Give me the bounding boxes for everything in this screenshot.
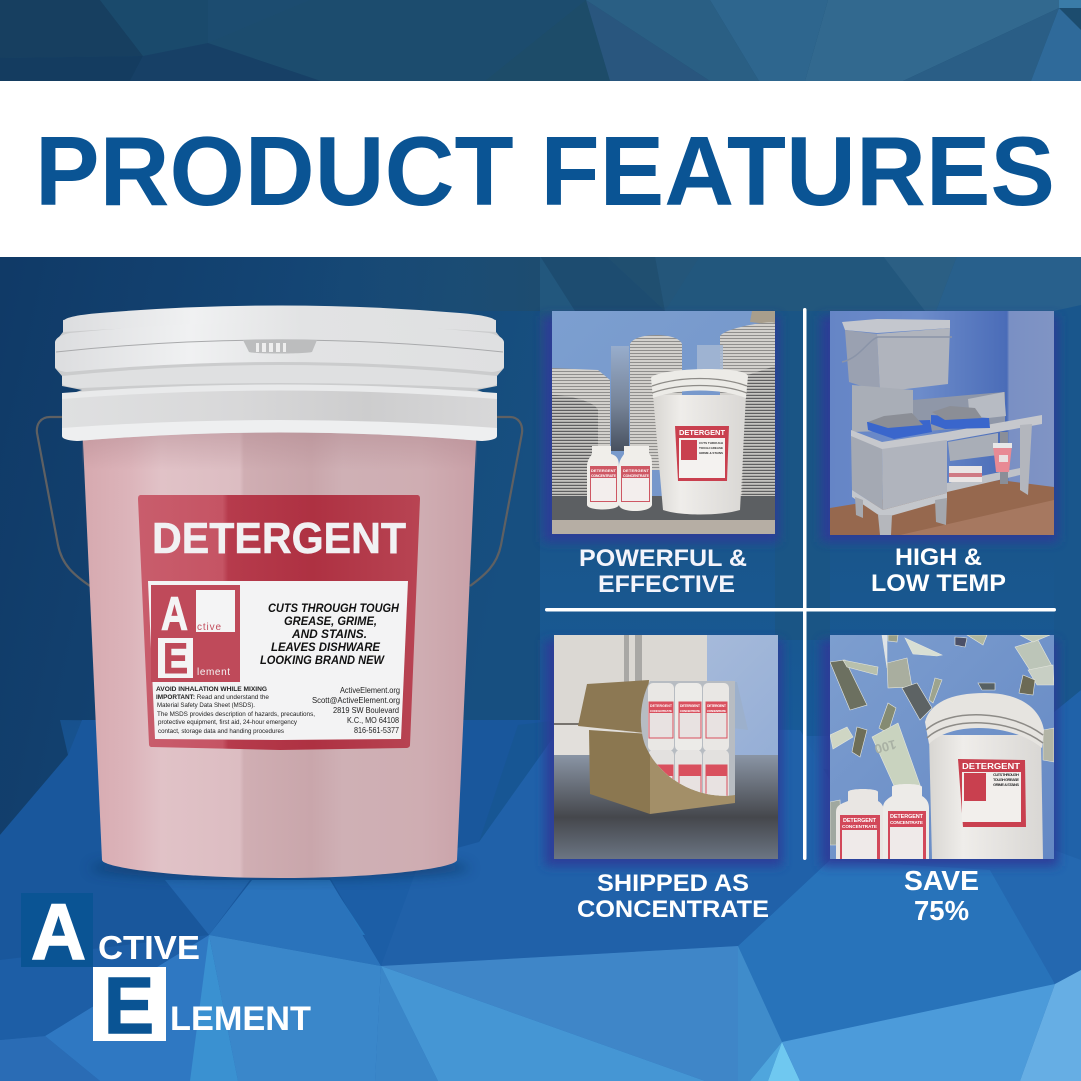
lid tab ribs [256, 343, 286, 352]
label contact text: ActiveElement.org [340, 686, 400, 695]
boxed bottles: DETERGENT [707, 704, 727, 708]
banknotes [830, 635, 1054, 845]
bucket [37, 306, 522, 879]
label contact text: 816-561-5377 [354, 726, 399, 735]
big pail: DETERGENT [962, 762, 1020, 771]
lid tab [243, 340, 317, 354]
label slogan: GREASE, GRIME, [284, 616, 377, 628]
caption: powerful [579, 545, 747, 598]
label contact text: 2819 SW Boulevard [333, 706, 399, 715]
bucket body [82, 420, 477, 878]
label warning text: The MSDS provides description of hazards, precautions, [157, 711, 315, 718]
mini pail [651, 369, 748, 514]
photo: dishwasher [830, 311, 1054, 535]
label logo [151, 585, 240, 683]
boxed bottles [640, 681, 735, 796]
label slogan: LOOKING BRAND NEW [260, 655, 385, 667]
label logo: lement [197, 667, 230, 678]
caption: save: 75% [914, 895, 969, 926]
label logo: ctive [197, 622, 221, 633]
tilted 100 on banknote: 100 [873, 737, 898, 757]
title: PRODUCT FEATURES [35, 116, 1055, 226]
caption: powerful: EFFECTIVE [598, 571, 735, 598]
mini bottles: DETERGENT [591, 468, 617, 473]
lower mid facets [0, 720, 1081, 1081]
big pail: TOUGH GREASE [993, 777, 1019, 782]
white title band [0, 81, 1081, 257]
dish racks [867, 406, 990, 439]
photo: box of bottles [554, 635, 778, 859]
label warning text: contact, storage data and handing procedures [158, 728, 285, 735]
navy upper facets [0, 256, 1081, 900]
large bottles: DETERGENT [890, 814, 924, 820]
boxed bottles: DETERGENT [680, 704, 701, 708]
big pail [925, 693, 1044, 859]
bucket lid [55, 306, 504, 441]
label logo: A [161, 587, 188, 640]
large bottles: CONCENTRATE [842, 824, 877, 829]
big pail: GRIME & STAINS [993, 782, 1019, 787]
photo shadows [543, 316, 1058, 866]
Active Element logo: A [31, 887, 86, 976]
label white panel [148, 581, 408, 740]
mini pail: TOUGH GREASE [699, 446, 723, 450]
Active Element logo: LEMENT [170, 1000, 311, 1038]
hood [842, 319, 952, 392]
label warning text: IMPORTANT: Read and understand the [156, 694, 269, 701]
mini bottles: CONCENTRATE [623, 474, 650, 478]
large bottles: CONCENTRATE [890, 820, 923, 825]
label warning text: AVOID INHALATION WHILE MIXING [156, 686, 267, 693]
label warning text: Material Safety Data Sheet (MSDS). [157, 702, 255, 709]
boxed bottles: CONCENTRATE [650, 709, 672, 713]
bucket handle [37, 417, 522, 586]
bucket floor shadow [90, 857, 470, 879]
caption: save [904, 865, 979, 926]
mini bottles: DETERGENT [623, 468, 650, 473]
label heading: DETERGENT [152, 514, 406, 563]
big pail: CUTS THROUGH [993, 772, 1019, 777]
mini pail: DETERGENT [679, 430, 726, 437]
label logo: E [163, 635, 188, 683]
mini pail: GRIME & STAINS [699, 451, 723, 455]
label slogan: CUTS THROUGH TOUGH [268, 603, 400, 615]
label contact text [312, 686, 400, 735]
caption: shipped [577, 870, 769, 923]
mini bottles [587, 446, 652, 511]
Active Element logo [21, 887, 311, 1050]
caption: high low temp [871, 544, 1006, 597]
Active Element logo: CTIVE [98, 929, 200, 966]
label contact text: K.C., MO 64108 [347, 716, 399, 725]
Active Element logo: E [104, 961, 154, 1050]
product label [138, 495, 420, 750]
caption: high low temp: LOW TEMP [871, 570, 1006, 597]
caption: save: SAVE [904, 865, 979, 896]
large bottles [836, 784, 929, 859]
label contact text: Scott@ActiveElement.org [312, 696, 400, 705]
label warning text [156, 686, 315, 735]
top strip facets [0, 0, 1081, 81]
large bottles: DETERGENT [843, 818, 877, 824]
label warning text: protective equipment, first aid, 24-hour emergency [158, 719, 298, 726]
caption: shipped: CONCENTRATE [577, 896, 769, 923]
caption: shipped: SHIPPED AS [597, 870, 749, 897]
divider lines [545, 308, 1056, 860]
boxed bottles: CONCENTRATE [680, 709, 700, 713]
boxed bottles: DETERGENT [650, 704, 673, 708]
photo: falling money [830, 635, 1054, 859]
label slogan [260, 603, 400, 667]
mini pail: CUTS THROUGH [699, 441, 723, 445]
label slogan: LEAVES DISHWARE [271, 642, 380, 654]
boxed bottles: CONCENTRATE [707, 709, 726, 713]
caption: high low temp: HIGH & [895, 544, 982, 571]
machine frame [851, 385, 1042, 535]
caption: powerful: POWERFUL & [579, 545, 747, 572]
mini bottles: CONCENTRATE [591, 474, 617, 478]
label slogan: AND STAINS. [291, 629, 367, 641]
small pail and bottles [949, 443, 1012, 482]
photo: bucket with dish stacks [552, 311, 775, 534]
